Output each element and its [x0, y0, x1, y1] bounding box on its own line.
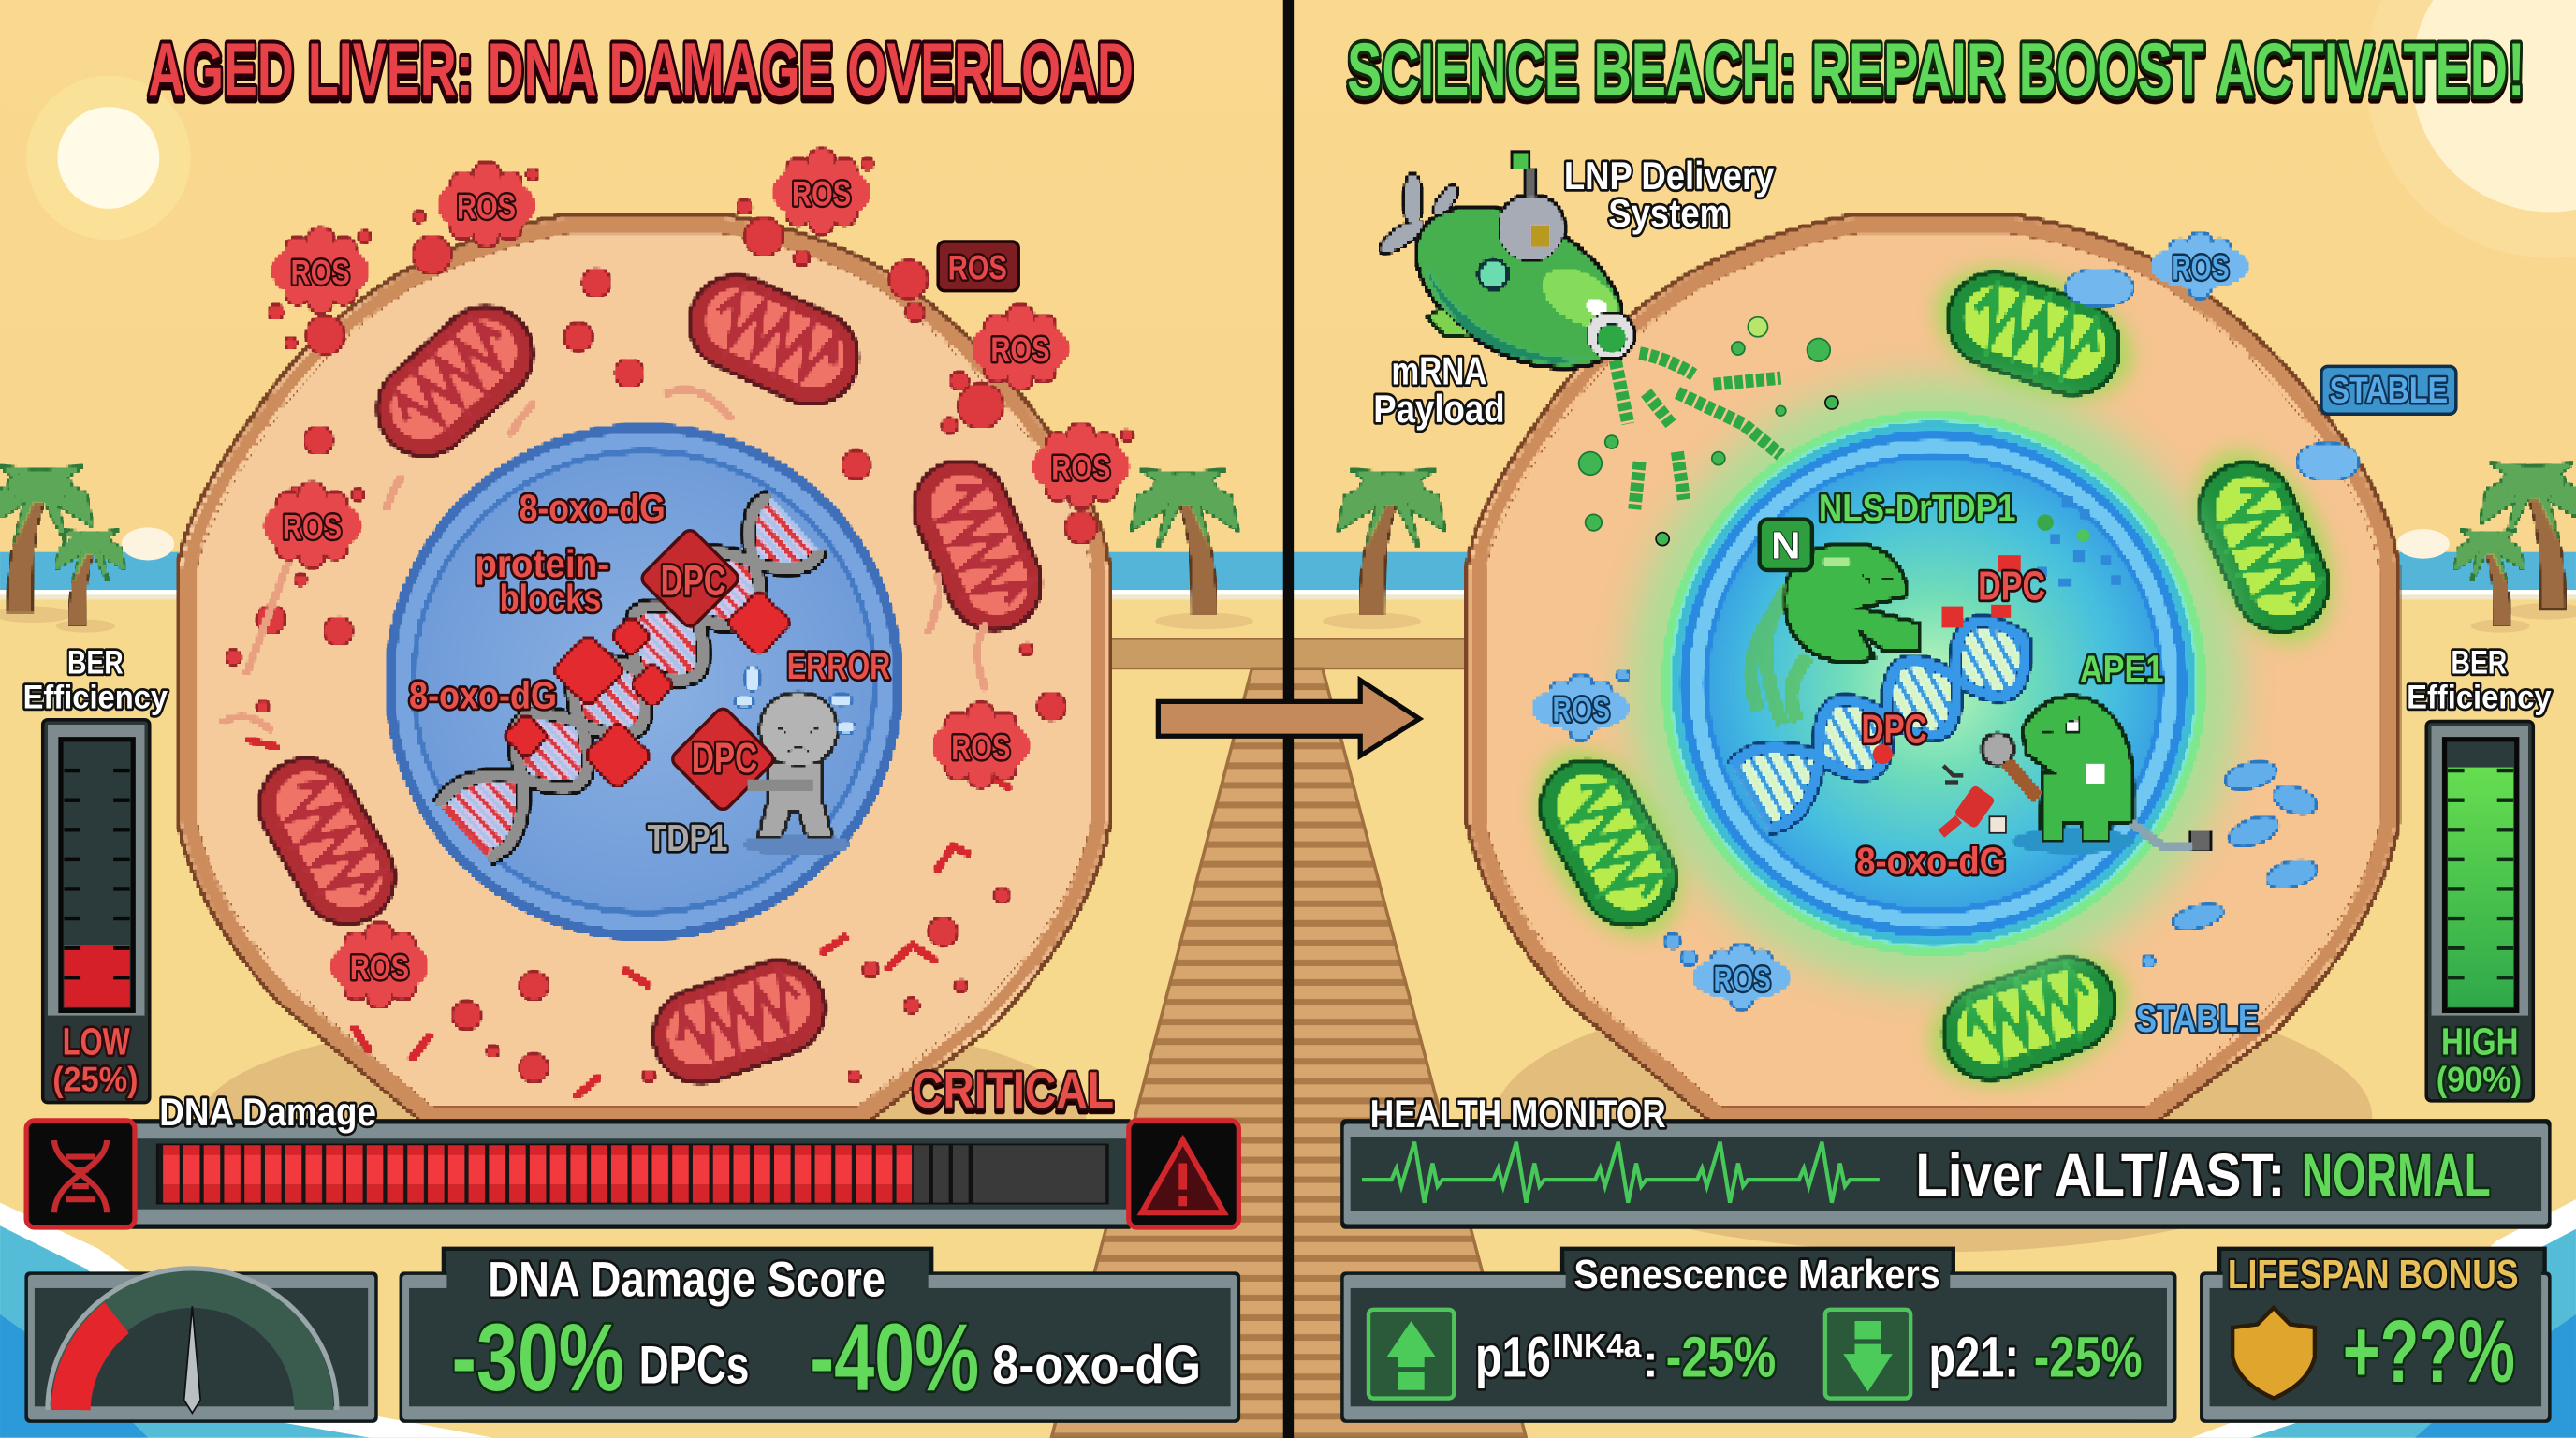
- -40%: -40%: [810, 1304, 979, 1411]
- cell membrane right: [1468, 215, 2398, 1123]
- TDP1 arm: [748, 782, 813, 788]
- p16 label: p16: [1475, 1326, 1551, 1390]
- boardwalk cross bar: [1101, 639, 1479, 668]
- LNP submarine: [1376, 153, 1649, 401]
- left cell: aged liver: [179, 159, 1132, 1123]
- NORMAL: NORMAL: [2302, 1141, 2491, 1210]
- ROS 8: [933, 703, 1029, 787]
- DPC block on DNA: [639, 527, 741, 629]
- meter bezel: [2431, 726, 2528, 1016]
- BER label: [23, 645, 168, 715]
- damaged DNA helix: [436, 493, 824, 862]
- N badge: [1760, 520, 1812, 570]
- health monitor panel: [1340, 1092, 2552, 1229]
- dissolving fragments: [2037, 496, 2121, 587]
- ticks: [2448, 770, 2513, 977]
- BER label: Efficiency: [23, 679, 168, 715]
- tab cover: [446, 1252, 929, 1295]
- dome: [1499, 196, 1564, 261]
- cell shadows on sand: [202, 983, 2372, 1252]
- ROS clouds left: [265, 150, 1129, 1007]
- gauge red zone: [71, 1318, 117, 1410]
- hull: [1390, 175, 1649, 401]
- label CRITICAL: CRITICAL: [912, 1062, 1114, 1119]
- needle: [184, 1306, 200, 1413]
- mRNA strands: [1613, 350, 1781, 509]
- ROS blue 3: ROS: [1714, 960, 1771, 998]
- bar track: [156, 1143, 1109, 1204]
- mitochondria green: [1525, 260, 2342, 1092]
- shield icon: [2232, 1308, 2315, 1399]
- nucleus glow: [1628, 378, 2239, 990]
- DPC block held by TDP1: DPC: [692, 734, 757, 782]
- HIGH readout: [2437, 1020, 2522, 1098]
- HIGH readout: HIGH: [2441, 1020, 2519, 1064]
- bezel: [1344, 1123, 2548, 1224]
- p16 value: -25%: [1666, 1326, 1776, 1390]
- cable: [2095, 785, 2202, 848]
- ROS debris blobs: [227, 159, 1132, 1081]
- ROS 2: [439, 163, 534, 246]
- liver status: Liver ALT/AST:: [1915, 1141, 2285, 1210]
- ECG trace: [1362, 1142, 1880, 1203]
- TDP1 sad grey character: [736, 668, 855, 855]
- sea horizon band: [0, 552, 2576, 600]
- ROS blue 2: [1532, 675, 1628, 740]
- heading: HEALTH MONITOR: [1370, 1092, 1666, 1136]
- gauge arc band: [71, 1288, 314, 1410]
- mRNA particles: [1579, 317, 1838, 546]
- meter window: [2445, 740, 2517, 1010]
- label 8-oxo-dG right: 8-oxo-dG: [1856, 840, 2006, 883]
- label 8-oxo-dG upper: 8-oxo-dG: [520, 486, 666, 529]
- tab: [2219, 1249, 2545, 1298]
- sand lower beach: [0, 600, 2576, 1438]
- ROS 3: ROS: [792, 174, 851, 213]
- -30%: -30%: [452, 1304, 624, 1411]
- ROS blue 1: ROS: [2172, 248, 2230, 286]
- ticks: [65, 770, 130, 977]
- label mRNA Payload: [1373, 349, 1505, 431]
- ROS 6: [1033, 424, 1129, 507]
- blue pills stable ROS: [1618, 670, 2319, 966]
- NLS-DrTDP1 green enzyme: [1751, 545, 1919, 723]
- body: [2024, 697, 2132, 842]
- label LNP Delivery System: LNP Delivery: [1564, 154, 1775, 198]
- wrench: [1983, 734, 2037, 797]
- tab: [444, 1249, 931, 1298]
- lifespan bonus panel: [2200, 1249, 2552, 1423]
- LOW readout: (25%): [52, 1060, 138, 1098]
- label DPC upper: DPC: [1978, 564, 2045, 609]
- frame: [1340, 1119, 2552, 1229]
- shadow: [2014, 829, 2132, 853]
- label protein-blocks: blocks: [500, 577, 601, 620]
- LOW readout: [52, 1020, 138, 1098]
- DPC block on DNA: DPC: [661, 556, 726, 604]
- p21 value: -25%: [2034, 1326, 2143, 1390]
- transition arrow: [1158, 681, 1419, 756]
- frame: [2200, 1271, 2552, 1423]
- icon down arrow: [1825, 1310, 1910, 1399]
- BER label: [2407, 645, 2552, 715]
- boardwalk: [1051, 668, 1526, 1438]
- sweat drops: [736, 668, 855, 733]
- cytoplasm damage squiggles: [222, 389, 1010, 1097]
- BER label: BER: [2452, 645, 2507, 682]
- white patch: [2088, 766, 2104, 782]
- sea corner right: [2191, 1199, 2576, 1438]
- STABLE label: STABLE: [2136, 997, 2259, 1040]
- INK4a superscript: INK4a: [1553, 1328, 1642, 1365]
- repaired DNA helix: [1732, 605, 2044, 831]
- ROS blue 3: [1693, 945, 1789, 1009]
- highlight: [1823, 557, 1850, 566]
- excised base fragments: [1938, 766, 2006, 838]
- motion trail: [1751, 583, 1808, 723]
- eyes: [2042, 718, 2080, 731]
- ROS 7: ROS: [283, 508, 342, 547]
- DNA damage bar panel: [131, 1119, 1131, 1229]
- icon up arrow: [1368, 1310, 1454, 1399]
- clouds: [122, 527, 2450, 560]
- frame: [1340, 1271, 2176, 1423]
- propeller: [1376, 174, 1460, 257]
- head: [761, 694, 836, 766]
- ROS blue 2: ROS: [1553, 690, 1610, 728]
- warning icon box: [1129, 1121, 1238, 1227]
- bar body: [131, 1138, 1131, 1210]
- DNA icon box: [26, 1121, 135, 1227]
- mitochondria red: [243, 261, 1055, 1095]
- nozzle: [1587, 312, 1633, 359]
- nucleus right: [1662, 413, 2204, 955]
- body: [2210, 1288, 2541, 1406]
- palm tree center right: [1339, 470, 1444, 614]
- meter frame: [43, 720, 150, 1103]
- plug: [2191, 831, 2210, 849]
- antenna: [1513, 153, 1534, 212]
- BER meter left: [23, 645, 168, 1103]
- heading: Senescence Markers: [1573, 1252, 1940, 1298]
- label LNP Delivery System: System: [1608, 191, 1730, 235]
- meter window: [61, 740, 133, 1010]
- ROS 2: ROS: [457, 187, 516, 226]
- ROS blue 1: [2152, 233, 2247, 298]
- protein blocks on DNA: [505, 592, 790, 788]
- ROS 4 tag: [938, 242, 1018, 291]
- label protein-blocks: [475, 542, 609, 620]
- body: [409, 1288, 1231, 1406]
- DPCs: DPCs: [639, 1336, 749, 1396]
- ROS 5: [973, 305, 1068, 389]
- tab: [1562, 1249, 1954, 1298]
- meter bezel: [48, 725, 145, 1016]
- fin: [1429, 301, 1510, 337]
- label ERROR: ERROR: [787, 644, 890, 687]
- body: [759, 764, 831, 838]
- label TDP1: TDP1: [648, 816, 728, 859]
- tab cover: [2223, 1252, 2541, 1295]
- STABLE tag: STABLE: [2330, 371, 2448, 411]
- 8-oxo-dG: 8-oxo-dG: [992, 1336, 1201, 1396]
- palm trees left: [0, 466, 124, 624]
- BER label: BER: [67, 645, 124, 682]
- ROS 6: ROS: [1051, 448, 1110, 487]
- body: [1786, 545, 1919, 661]
- palm tree center left: [1132, 470, 1237, 614]
- LOW readout: LOW: [63, 1020, 130, 1064]
- right cell: science beach: [1468, 215, 2456, 1123]
- empty segments: [914, 1145, 1105, 1203]
- label protein-blocks: protein-: [475, 542, 609, 585]
- meter frame: [2426, 721, 2533, 1101]
- red segments: [159, 1145, 912, 1203]
- HIGH readout: (90%): [2437, 1060, 2522, 1098]
- ROS 1: ROS: [291, 254, 350, 292]
- gauge outer rim: [48, 1269, 337, 1410]
- bonus value: +??%: [2343, 1302, 2515, 1401]
- label 8-oxo-dG lower: 8-oxo-dG: [409, 673, 557, 716]
- ROS 4 tag: ROS: [948, 248, 1007, 286]
- gauge bezel: [28, 1275, 374, 1419]
- green fill 90%: [2448, 768, 2513, 1007]
- APE1 green enzyme with wrench: [1983, 697, 2210, 853]
- senescence markers panel: [1340, 1249, 2176, 1423]
- red fill 25%: [65, 945, 130, 1007]
- heading: DNA Damage Score: [488, 1253, 886, 1308]
- frame highlight: [131, 1123, 1131, 1224]
- cell membrane left: [179, 215, 1109, 1123]
- body: [1351, 1288, 2167, 1406]
- sea corner left: [0, 1203, 493, 1438]
- N badge: N: [1771, 524, 1801, 567]
- palm shadows: [0, 603, 2576, 633]
- left title: AGED LIVER: DNA DAMAGE OVERLOAD: [148, 28, 1134, 112]
- BER label: Efficiency: [2407, 679, 2552, 715]
- nucleus left: [386, 424, 902, 940]
- eye: [1862, 575, 1895, 581]
- sad face: [775, 726, 820, 753]
- label NLS-DrTDP1: NLS-DrTDP1: [1819, 486, 2015, 529]
- ROS 3: [774, 150, 869, 233]
- label DNA Damage: DNA Damage: [159, 1090, 376, 1134]
- shadow: [744, 835, 849, 855]
- ROS 9: ROS: [350, 948, 409, 987]
- colon: :: [1643, 1337, 1658, 1387]
- bar frame: [131, 1119, 1131, 1229]
- blue blobs on membrane: [2067, 270, 2358, 479]
- DPC block held by TDP1: [669, 706, 776, 813]
- label LNP Delivery System: [1564, 154, 1775, 235]
- bezel: [402, 1275, 1237, 1419]
- gauge panel: [24, 1269, 378, 1423]
- DPC fragments: [1873, 555, 2021, 764]
- body: [1351, 1137, 2541, 1211]
- tab cover: [1566, 1252, 1950, 1295]
- ROS 7: [265, 483, 359, 566]
- gauge face: [35, 1288, 368, 1406]
- bezel: [2203, 1275, 2548, 1419]
- DNA damage score panel: [400, 1249, 1240, 1423]
- p21 label: p21:: [1928, 1326, 2019, 1390]
- ROS 8: ROS: [951, 728, 1010, 767]
- bezel: [1344, 1275, 2174, 1419]
- porthole: [1475, 257, 1512, 292]
- label DPC lower: DPC: [1862, 706, 1927, 752]
- mitochondria glow: [1506, 243, 2361, 1109]
- ROS 5: ROS: [990, 330, 1050, 369]
- center divider: [1283, 0, 1294, 1438]
- sun right: [2365, 0, 2576, 258]
- ROS 9: [332, 923, 427, 1007]
- label mRNA Payload: Payload: [1373, 387, 1505, 431]
- label APE1: APE1: [2080, 647, 2163, 690]
- palm trees right: [2455, 463, 2576, 624]
- gauge frame: [24, 1271, 378, 1423]
- sun left: [26, 76, 191, 240]
- frame: [400, 1271, 1240, 1423]
- ROS 1: [272, 228, 368, 312]
- label mRNA Payload: mRNA: [1392, 349, 1486, 393]
- BER meter right: [2407, 645, 2552, 1101]
